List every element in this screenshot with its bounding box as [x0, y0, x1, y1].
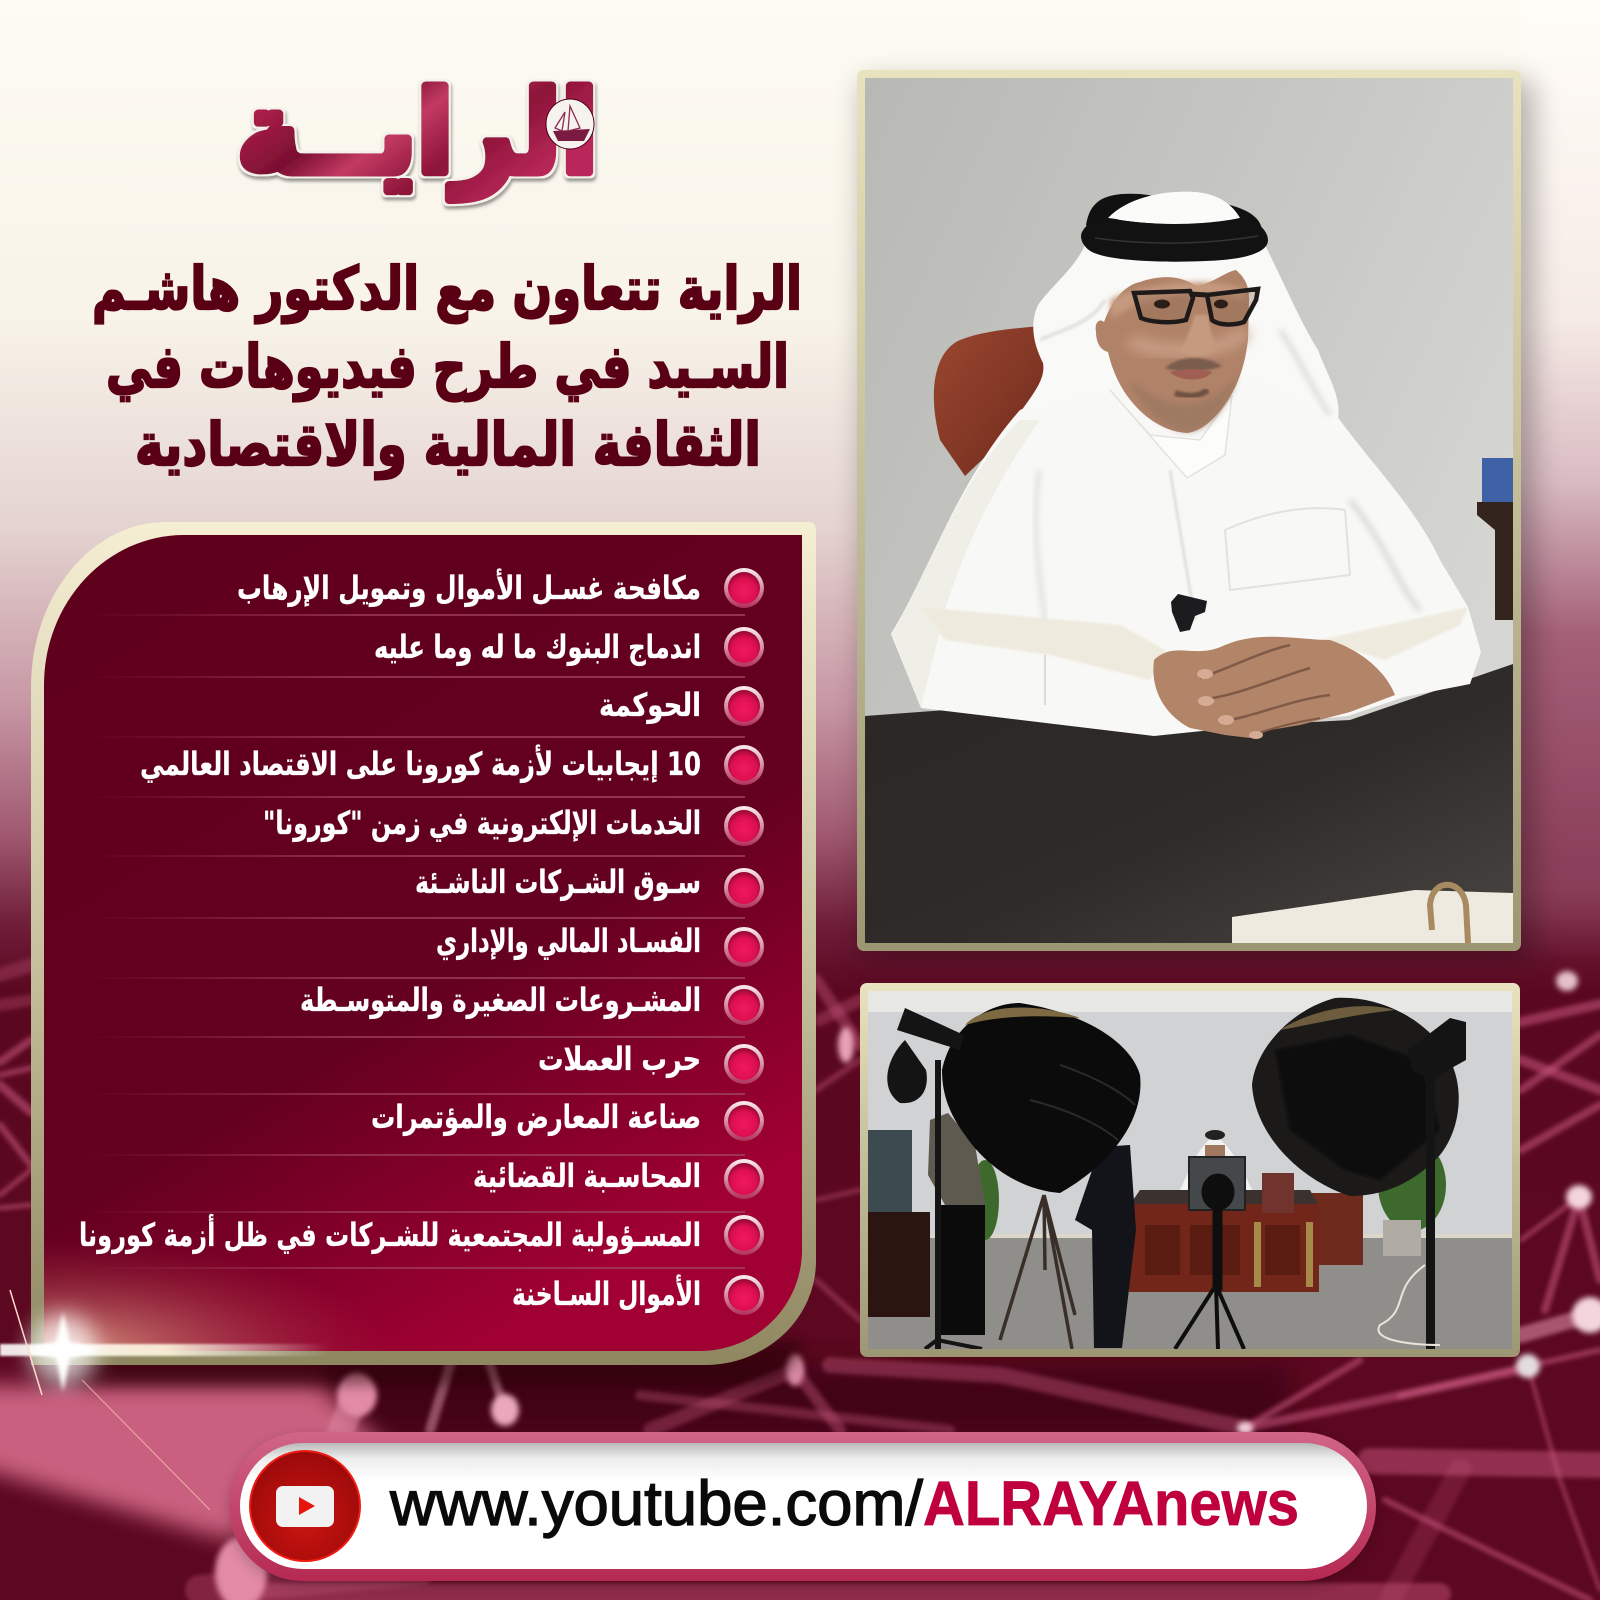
list bullets [724, 568, 764, 1315]
list items text: المشـروعات الصغيرة والمتوسـطة [300, 981, 701, 1019]
studio detail: tv and cabinet [868, 1130, 930, 1317]
studio detail: seated man [1180, 1130, 1252, 1190]
studio detail: side tripod [1000, 1195, 1075, 1349]
photo: man at desk [857, 70, 1521, 951]
studio detail: back cabinet [1312, 1193, 1363, 1265]
background: pink light wedge [0, 1385, 420, 1560]
list items text: مكافحة غسـل الأموال وتمويل الإرهاب [237, 568, 701, 607]
photo detail: collar [1110, 390, 1232, 478]
list items text: صناعة المعارض والمؤتمرات [371, 1098, 701, 1136]
photo 1 frame shadow [862, 80, 1534, 960]
list items text: الخدمات الإلكترونية في زمن "كورونا" [263, 804, 701, 842]
studio detail: right softbox [1252, 998, 1459, 1196]
studio detail: monitor on camera [1189, 1157, 1245, 1210]
icon: youtube [250, 1451, 360, 1561]
photo detail: desk calendar [1232, 885, 1513, 943]
photo detail: face [1096, 270, 1249, 433]
background: glow nodes [215, 971, 1600, 1600]
photo detail: desk [865, 664, 1513, 943]
studio detail: desk [1129, 1173, 1319, 1292]
photo detail: clasped hands [1153, 637, 1395, 739]
list panel shadow [40, 1340, 800, 1385]
list items text: حرب العملات [538, 1040, 701, 1078]
studio detail: plants [978, 1156, 1446, 1256]
youtube url: ALRAYAnews [923, 1469, 1299, 1539]
youtube url: www.youtube.com/ [389, 1469, 923, 1539]
title: السـيد في طرح فيديوهات في [106, 332, 789, 402]
studio detail: floor cable [1378, 1265, 1440, 1345]
logo emblem: dhow in oval [546, 99, 594, 149]
list items text: الحوكمة [599, 686, 701, 724]
lens flare [0, 1290, 330, 1510]
studio detail: left softbox [942, 1003, 1140, 1193]
list items text: سـوق الشـركات الناشـئة [415, 863, 701, 901]
list items text: اندماج البنوك ما له وما عليه [374, 628, 701, 666]
panel: topics list [31, 522, 816, 1365]
title: الراية تتعاون مع الدكتور هاشـم [92, 254, 802, 324]
logo [237, 67, 598, 200]
pill shadow [229, 1436, 1376, 1585]
list items text: المحاسـبة القضائية [473, 1157, 701, 1195]
list items text: المسـؤولية المجتمعية للشـركات في ظل أزمة كورونا [79, 1214, 701, 1254]
title: الثقافة المالية والاقتصادية [135, 410, 761, 480]
photo: studio setup [860, 983, 1520, 1357]
photo detail: leather chair [934, 326, 1045, 476]
photo detail: blue box and side table [1477, 458, 1513, 620]
photo detail: glasses [1134, 289, 1258, 324]
studio detail: right crew member [1075, 1145, 1136, 1348]
title [92, 254, 802, 480]
studio detail: left crew member [928, 1113, 985, 1335]
list items text: 10 إيجابيات لأزمة كورونا على الاقتصاد العالمي [140, 744, 701, 784]
list items text: الفسـاد المالي والإداري [436, 922, 701, 960]
background: network lines [0, 965, 1600, 1600]
photo detail: agal and kufiya top [1081, 192, 1268, 262]
studio detail: light heads and stands [887, 1008, 1466, 1349]
photo detail: microphone clip [1171, 594, 1207, 632]
photo detail: ghutra headcloth [1017, 245, 1339, 428]
list items text: الأموال السـاخنة [512, 1274, 701, 1313]
list item dividers [85, 614, 745, 1269]
logo wordmark: الرايــة [237, 67, 598, 200]
list items text [79, 568, 701, 1313]
photo detail: white thobe [891, 375, 1481, 736]
youtube link bar [229, 1432, 1376, 1581]
studio detail: camera tripod [1175, 1174, 1244, 1349]
